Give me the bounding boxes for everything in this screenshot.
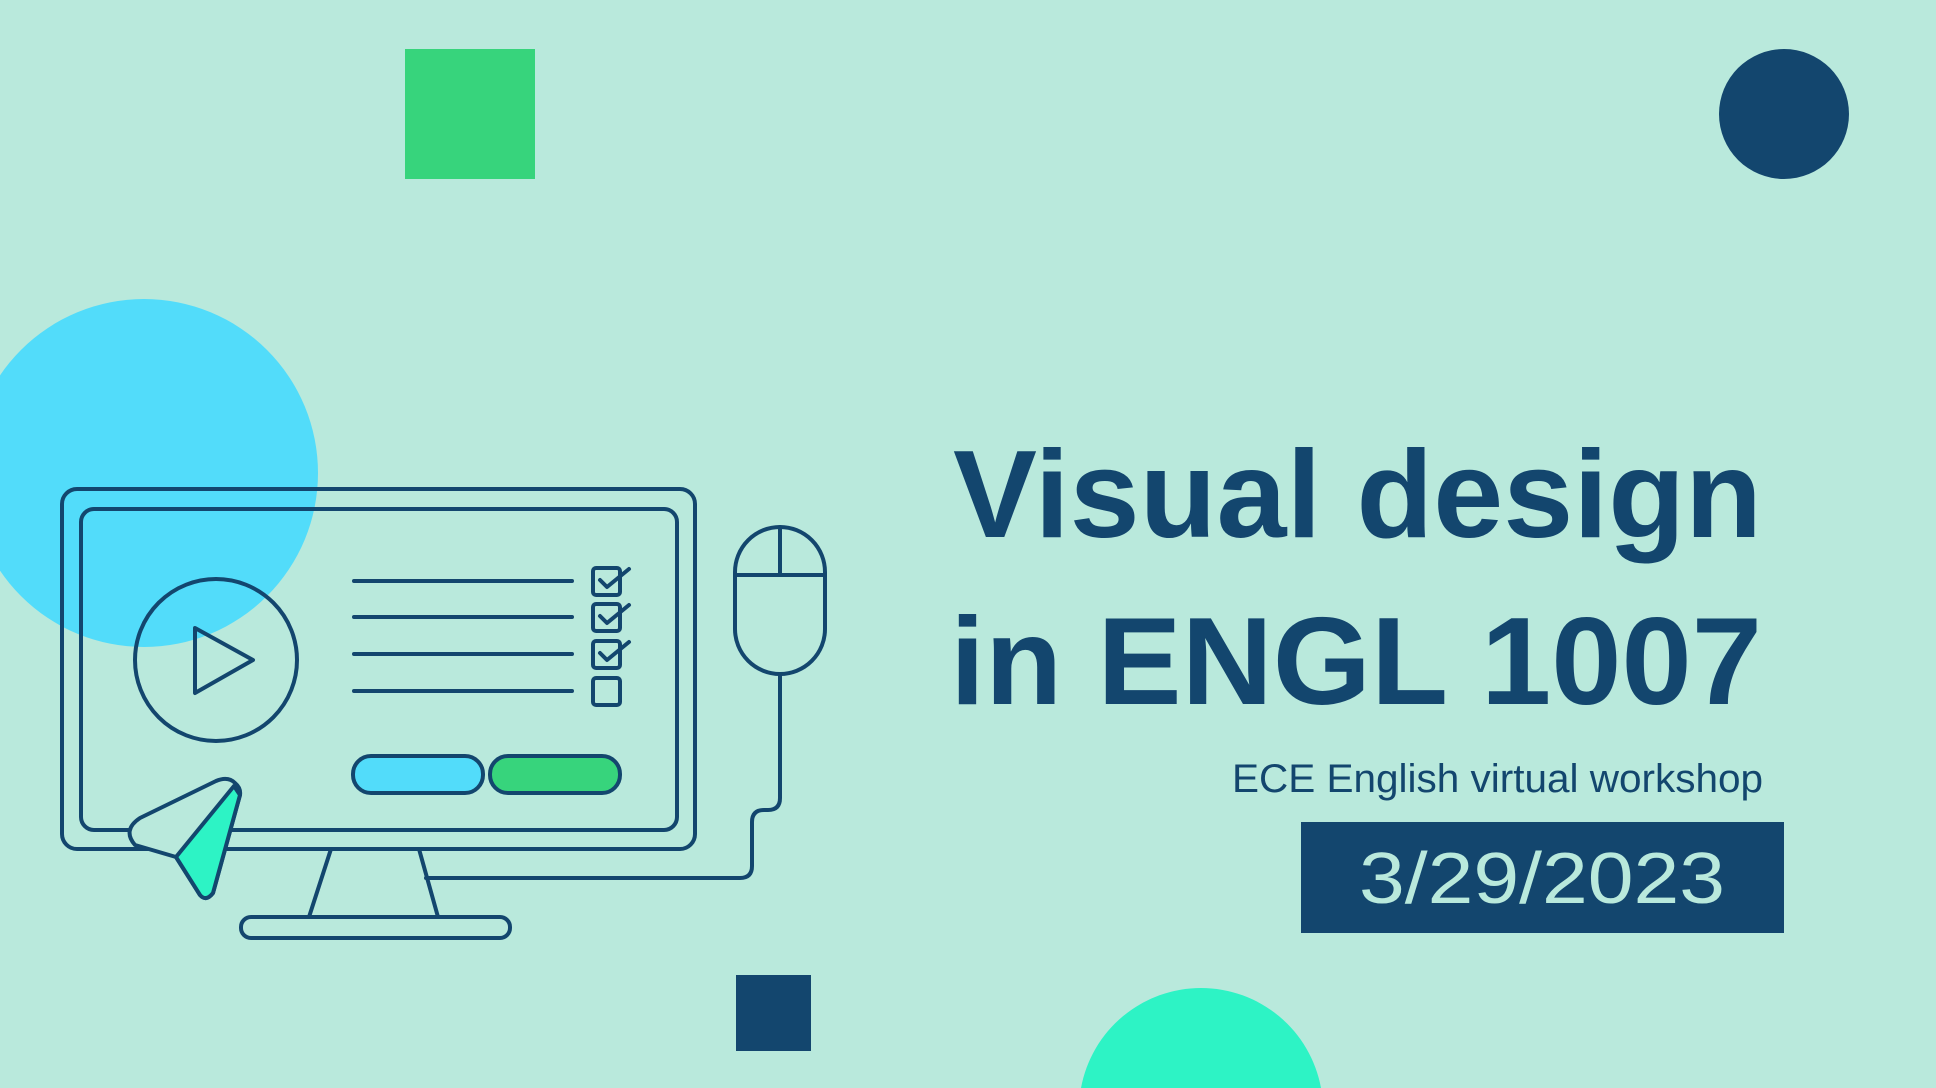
title: [950, 426, 1762, 731]
buttons: [353, 756, 620, 793]
icon: mouse: [735, 527, 825, 674]
decor: dark circle: [1719, 49, 1849, 179]
illustration: computer: [62, 489, 825, 938]
cable: [426, 674, 780, 878]
icon: play button: [135, 579, 297, 741]
decor: green square: [405, 49, 535, 179]
decor: dark square: [736, 975, 811, 1051]
title: in ENGL 1007: [950, 593, 1762, 731]
title: Visual design: [953, 426, 1762, 564]
monitor screen: [81, 509, 677, 830]
monitor frame: [62, 489, 695, 849]
icon: cursor: [130, 779, 240, 898]
subtitle: ECE English virtual workshop: [1232, 757, 1763, 801]
date box: 3/29/2023: [1359, 839, 1725, 919]
date box: [1301, 822, 1784, 933]
text lines with checkboxes: [354, 568, 629, 705]
decor: blue circle: [0, 299, 318, 647]
decor: teal circle: [1081, 988, 1321, 1088]
stand: [241, 849, 510, 938]
